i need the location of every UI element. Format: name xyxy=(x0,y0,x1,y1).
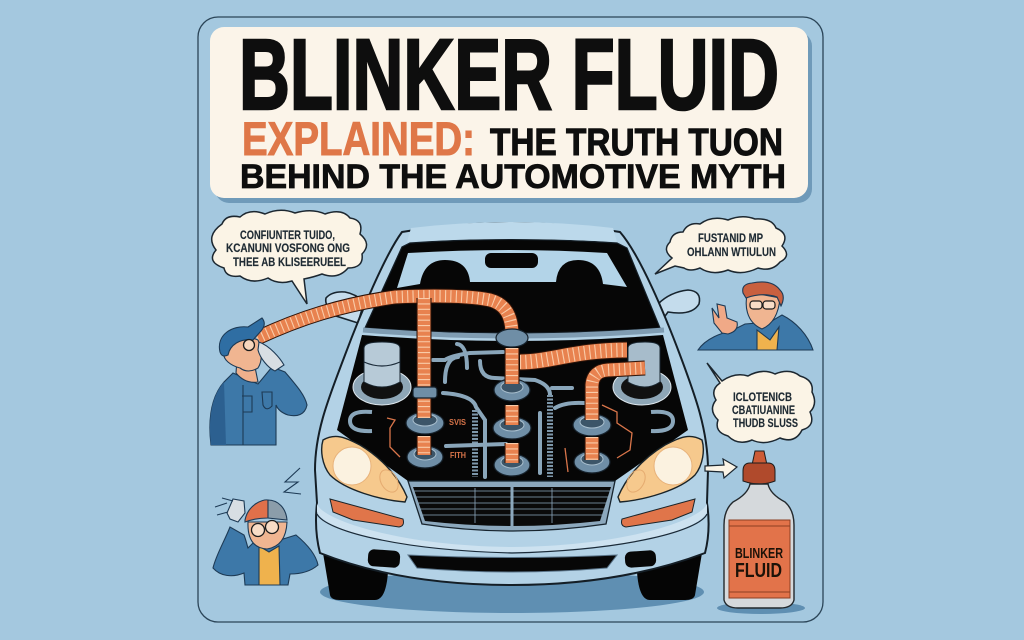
mechanic: saluting with hose xyxy=(210,318,307,445)
windshield xyxy=(365,222,660,333)
hood lip xyxy=(363,330,664,336)
car body xyxy=(315,223,709,585)
top right bubble text: FUSTANID MP xyxy=(698,233,763,245)
bottle label text: BLINKER xyxy=(735,545,783,562)
ground shadow xyxy=(320,571,704,613)
speech bubble: top right xyxy=(655,217,787,274)
speech bubble: left xyxy=(212,210,367,304)
blinker fluid bottle xyxy=(717,451,805,614)
wheels xyxy=(320,535,705,600)
engine bay xyxy=(337,335,688,481)
title line 2 continuation: THE TRUTH TUON xyxy=(490,122,783,164)
mechanic: scratching head xyxy=(213,468,318,585)
title line 1: BLINKER FLUID xyxy=(239,19,779,131)
blinker fluid bottle: FLUID xyxy=(735,560,782,582)
right reservoir xyxy=(613,342,671,405)
wiring labels: SVIS xyxy=(449,418,467,427)
outer frame xyxy=(198,17,823,622)
rear window xyxy=(397,250,627,288)
c-clamps xyxy=(350,412,673,431)
side mirrors xyxy=(326,290,700,323)
grille xyxy=(408,481,615,531)
hoses on car xyxy=(257,296,645,420)
left reservoir xyxy=(353,342,411,405)
speech bubble: lower right: THUDB SLUSS xyxy=(733,418,798,430)
left bubble text: CONFIUNTER TUIDO, xyxy=(240,230,335,242)
speech bubble: left: THEE AB KLISEERUEEL xyxy=(233,257,346,269)
headlights xyxy=(322,436,703,527)
speech bubble: left: KCANUNI VOSFONG ONG xyxy=(226,243,350,255)
title line 3: BEHIND THE AUTOMOTIVE MYTH xyxy=(240,158,786,196)
car illustration xyxy=(257,222,709,613)
grey pipes xyxy=(433,344,584,477)
speech bubble: top right: OHLANN WTIULUN xyxy=(687,247,776,259)
title line 2: EXPLAINED: xyxy=(242,112,475,165)
title panel xyxy=(210,19,812,203)
collars xyxy=(406,379,611,476)
wiring labels: FITH xyxy=(450,451,466,460)
lower right bubble text: ICLOTENICB xyxy=(733,392,792,404)
wiring labels xyxy=(449,418,467,460)
short hose segments xyxy=(424,405,592,463)
rearview mirror xyxy=(485,253,538,268)
speech bubble: lower right: CBATIUANINE xyxy=(732,405,795,417)
speech bubble: lower right xyxy=(707,363,815,443)
arrow xyxy=(705,459,737,478)
orange wiring marks xyxy=(387,405,632,472)
mechanic: waving xyxy=(698,282,813,350)
bumper xyxy=(317,503,707,572)
